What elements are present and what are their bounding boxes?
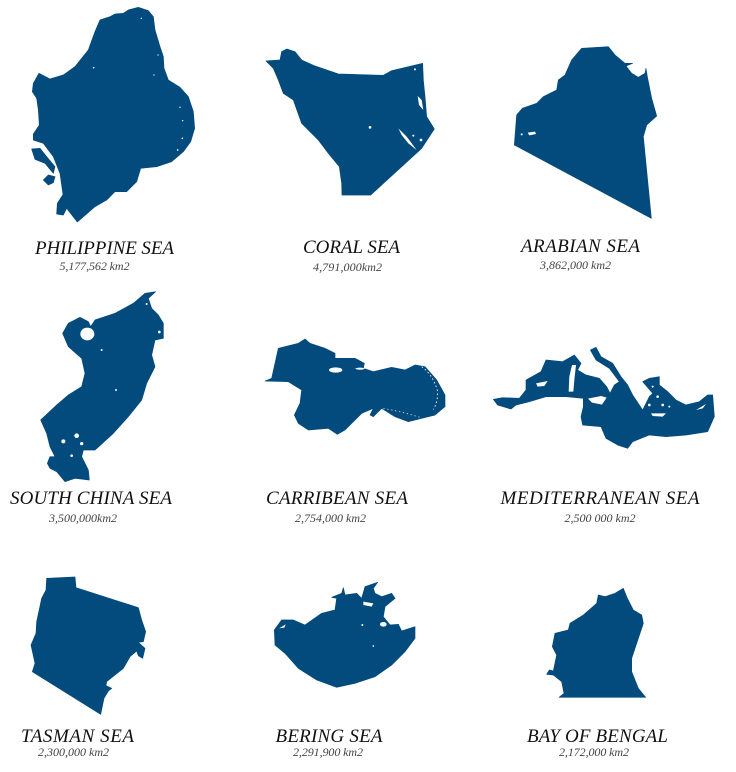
heading: Philippine Sea: PHILIPPINE SEA — [34, 238, 174, 259]
shape: Bering Sea — [274, 582, 415, 687]
area: Philippine Sea: 5,177,562 km2 — [60, 259, 130, 273]
area: Mediterranean Sea: 2,500 000 km2 — [564, 511, 636, 525]
shape: Carribean Sea — [265, 339, 445, 434]
heading: South China Sea: SOUTH CHINA SEA — [10, 488, 172, 509]
panel: Mediterranean Sea — [493, 347, 714, 525]
shape: Philippine Sea — [32, 7, 195, 222]
area: Bering Sea: 2,291,900 km2 — [293, 745, 363, 759]
heading: Mediterranean Sea: MEDITERRANEAN SEA — [500, 488, 700, 509]
shape: South China Sea — [41, 292, 163, 482]
area: Arabian Sea: 3,862,000 km2 — [539, 258, 611, 272]
area: Coral Sea: 4,791,000km2 — [313, 260, 382, 274]
shape: Coral Sea — [266, 49, 434, 195]
shape: Arabian Sea — [514, 47, 657, 218]
panel: Philippine Sea — [32, 7, 195, 273]
heading: Bay of Bengal: BAY OF BENGAL — [527, 726, 668, 747]
shape: Bay of Bengal — [547, 588, 646, 697]
area: Carribean Sea: 2,754,000 km2 — [295, 511, 366, 525]
shape: Tasman Sea — [31, 577, 146, 714]
area: Tasman Sea: 2,300,000 km2 — [38, 745, 109, 759]
panel: Tasman Sea — [21, 577, 146, 759]
panel: Arabian Sea — [514, 47, 657, 272]
heading: Carribean Sea: CARRIBEAN SEA — [266, 488, 408, 509]
heading: Bering Sea: BERING SEA — [276, 726, 383, 747]
area: South China Sea: 3,500,000km2 — [48, 511, 117, 525]
panel: Coral Sea — [266, 49, 434, 274]
heading: Arabian Sea: ARABIAN SEA — [519, 236, 640, 257]
heading: Tasman Sea: TASMAN SEA — [21, 726, 134, 747]
panel: Bay of Bengal — [527, 588, 668, 759]
shape: Mediterranean Sea — [493, 347, 714, 448]
panel: Bering Sea — [274, 582, 415, 759]
panel: Carribean Sea — [265, 339, 445, 525]
panel: South China Sea — [10, 292, 172, 525]
heading: Coral Sea: CORAL SEA — [303, 237, 400, 258]
area: Bay of Bengal: 2,172,000 km2 — [559, 745, 629, 759]
